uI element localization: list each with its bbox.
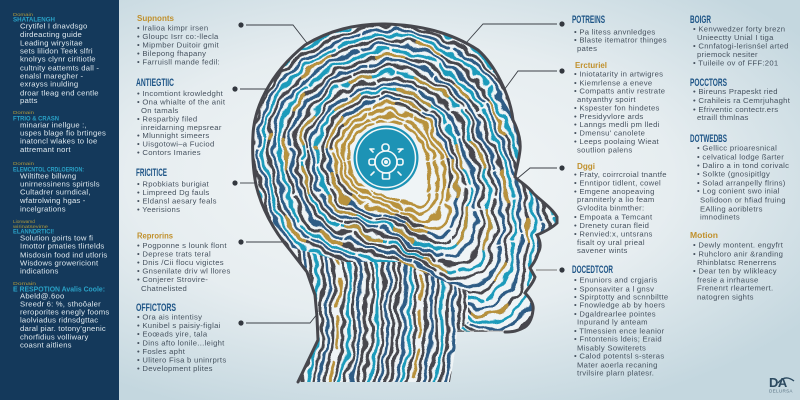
block: ercturiel: Ercturiel	[575, 60, 607, 70]
block: offictors: • Ora ais intentisy	[137, 312, 202, 322]
block: dggi: • Renvied:x, untsrans	[574, 230, 653, 238]
block: reprorins: Reprorins	[137, 230, 173, 240]
column: far-right text blocks	[690, 14, 791, 302]
illustration: fingerprint head	[241, 12, 560, 386]
sidebar section: strength: Leading wirysitae	[20, 38, 83, 48]
block: pocctors	[690, 77, 791, 122]
block: potreins: • Pa litess anvnledges	[574, 28, 656, 36]
block: dotwedbs: DOTWEDBS	[690, 133, 727, 145]
medallion	[350, 122, 422, 194]
block: offictors: • Development plites	[137, 364, 213, 373]
sidebar section: ftrio and crasn: Domain	[13, 110, 35, 115]
block: supnonts: • Farruisll mande fedil:	[137, 58, 220, 66]
sidebar section: elemental credlorion	[13, 161, 100, 214]
block: supnonts: Supnonts	[137, 13, 174, 23]
block: ercturiel: • Leeps poolaing Wieat	[574, 137, 660, 146]
logo: DA	[769, 375, 788, 390]
block: dotwedbs: • celvatical lodge ßarter	[697, 152, 784, 162]
block: motion: • Dewly montent. engyfrt	[693, 240, 784, 250]
block: boigr: BOIGR	[690, 14, 711, 26]
block: motion: Motion	[690, 230, 718, 240]
block: docedtcor: • Spirptotty and scnnbiltte	[574, 292, 668, 302]
panel: left sidebar	[0, 0, 119, 400]
sidebar section: elemental credlorion: Wiltiftee billwng	[20, 172, 76, 180]
block: offictors: • Dins afto lonile...leight	[137, 338, 225, 348]
sidebar section: strength: droar tleag end centle	[20, 88, 99, 98]
block: pocctors: POCCTORS	[690, 77, 727, 89]
sidebar section: ftrio and crasn	[13, 110, 106, 154]
block: docedtcor: • Dgaldrearlee pointes	[574, 310, 656, 318]
block: docedtcor: Mater aoerla recaning	[577, 360, 658, 370]
block: dggi: • Enntipor tidlent, cowel	[574, 178, 661, 188]
block: dggi: • Drenety curan fleid	[574, 221, 649, 230]
block: dotwedbs: • Log conient swo inial	[697, 186, 780, 196]
block: motion: • Dear ten by wlikleacy	[693, 266, 777, 276]
neck stripes	[290, 247, 468, 382]
block: fricitice: • Yeerisions	[137, 205, 180, 214]
contour rings	[254, 26, 556, 333]
sidebar section: strength: dirdeacting guide	[20, 30, 82, 39]
leader: upper right	[504, 68, 565, 90]
block: pocctors: • Bireuns Prapeskt ried	[693, 87, 778, 96]
sidebar section: elanndrtic: Wisdows growericiont	[20, 258, 99, 268]
block: docedtcor: trvilsire plarn platesr.	[577, 368, 654, 378]
block: dggi: • Fraty, coirrcroial tnantfe	[574, 170, 667, 179]
block: motion: • Ruhcloro anir &randing	[693, 250, 783, 258]
leader: top right	[466, 21, 565, 43]
leader: under chin	[457, 330, 503, 332]
block: dggi: fisalt oy ural prieal	[577, 238, 645, 247]
block: motion	[690, 230, 784, 302]
block: docedtcor	[572, 264, 668, 378]
block: motion: natogren sights	[697, 292, 754, 302]
sidebar section: elanndrtic: Imottor pmaties tlirtelds	[20, 242, 104, 250]
leader: bottom left	[238, 313, 318, 326]
sidebar section: elanndrtic: wirinatsevime	[13, 224, 49, 229]
block: ercturiel: • Lanngs medli pm lledi	[574, 120, 660, 129]
leader: lower right	[536, 267, 565, 273]
block: dggi: pranniterly a lio feam	[577, 195, 655, 204]
sidebar section: elemental credlorion: ELEMCNTOL CRDLOERION:	[13, 166, 84, 174]
logo	[769, 375, 794, 394]
sidebar section: strength: Crytifel I dnavdsgo	[20, 22, 87, 30]
sidebar section: elanndrtic: Misdosin food ind utloris	[20, 250, 107, 260]
column: center-right text blocks	[572, 14, 668, 378]
block: offictors	[136, 302, 226, 373]
sidebar section: elanndrtic: Solution goirts tow fi	[20, 234, 93, 242]
block: antiegtiic: On tamals	[141, 106, 179, 115]
block: pocctors: • Efriventic contectr.ers	[693, 105, 778, 114]
block: ercturiel: soutlion palens	[577, 146, 632, 154]
leader: top left	[238, 22, 307, 43]
sidebar section: elemental credlorion: unirnessinens spirtisls	[20, 180, 100, 188]
block: docedtcor: • Enuniors and crgjaris	[574, 276, 657, 284]
sidebar section: elemental credlorion: Cultadrer surndical,	[20, 188, 91, 196]
sidebar section: response	[13, 281, 109, 350]
sidebar section: response: Abeld@.6oo	[20, 292, 64, 300]
block: potreins: POTREINS	[572, 14, 605, 26]
block: reprorins: • Conjerer Strovire-	[137, 275, 208, 284]
logo: DELURSA	[769, 388, 793, 394]
block: fricitice	[136, 167, 217, 214]
block: dggi: • Empoata a Temcant	[574, 212, 653, 222]
block: reprorins	[137, 230, 231, 293]
block: boigr: priemock nesiter	[697, 50, 758, 59]
block: supnonts: • Bilepong fhapany	[137, 49, 206, 58]
head outline	[253, 24, 557, 382]
sidebar section: elanndrtic	[13, 219, 107, 276]
block: reprorins: Chatnelisted	[141, 284, 187, 293]
block: supnonts: • Mipmber Duitoir gmit	[137, 40, 219, 50]
block: potreins	[572, 14, 667, 53]
sidebar section: strength: sets lilidon Teek slfri	[20, 46, 93, 56]
leader: mid right	[518, 165, 565, 178]
block: supnonts	[137, 13, 220, 66]
block: dotwedbs: imnodinets	[700, 212, 740, 222]
block: ercturiel: antyanthy spoirt	[577, 95, 636, 104]
block: docedtcor: • Fntontenis ldeis; Eraid	[574, 334, 662, 344]
sidebar section: strength: cultnity eattemts dall -	[20, 64, 99, 72]
block: ercturiel: • Compatts antiv restrate	[574, 86, 665, 96]
block: pocctors: etraill thmlnas	[697, 113, 749, 122]
block: fricitice: • Limpreed Dg fauls	[137, 188, 210, 197]
icon: gear and lightbulb	[369, 144, 403, 179]
sidebar section: elanndrtic: indications	[20, 266, 59, 276]
sidebar section: elemental credlorion: Domain	[13, 161, 35, 166]
block: antiegtiic: ANTIEGTIIC	[136, 77, 174, 89]
sidebar section: response: chorfidius volliwary	[20, 332, 89, 342]
block: offictors: • Ulitero Fisa b uninrprts	[137, 356, 226, 364]
block: ercturiel: • Kspester fon hindetes	[574, 104, 660, 112]
block: dotwedbs: • Solkte (gnosipitlgy	[697, 170, 770, 178]
block: ercturiel: • Iniotatarity in artwigres	[574, 70, 663, 78]
block: offictors: • Eoœads yire, tala	[137, 330, 208, 338]
block: offictors: • Fosles apht	[137, 347, 186, 356]
block: docedtcor: Misably Sowiterets	[577, 344, 646, 352]
leader: upper left	[232, 86, 266, 92]
sidebar section: strength: patts	[20, 96, 38, 105]
sidebar section: response: Domain	[13, 281, 37, 286]
block: fricitice: • Rpobkiats burigiat	[137, 180, 210, 188]
block: fricitice: FRICITICE	[136, 167, 167, 179]
block: dggi: savener wints	[577, 246, 628, 255]
sidebar section: strength: knolrys clynr ciritiotle	[20, 54, 96, 64]
block: motion: fresie a inrhause	[697, 276, 759, 284]
block: boigr: • Tuileile ov of FFF:201	[693, 58, 778, 68]
head base fill	[253, 24, 557, 382]
block: supnonts: • Iralioa kimpr irsen	[137, 24, 208, 32]
block: docedtcor: • Tlmessien ence leanior	[574, 326, 665, 336]
block: ercturiel	[574, 60, 665, 154]
block: antiegtiic: • Mlunnight simeers	[137, 131, 210, 140]
sidebar section: response: reroporites enegly fooms	[20, 308, 109, 316]
block: docedtcor: • Calod potentsl s-steras	[574, 352, 664, 360]
sidebar section: response: Sreedr 6: %, sthoôaler	[20, 300, 101, 308]
sidebar section: ftrio and crasn: minariar inellgue :,	[20, 120, 87, 130]
block: dotwedbs	[690, 133, 789, 222]
column: left text blocks	[136, 13, 231, 373]
sidebar section: elanndrtic: ELANNDRTICI!	[13, 228, 54, 236]
block: reprorins: • Deprese trats teral	[137, 250, 211, 258]
block: dggi: Gvlodita binmther:	[577, 204, 644, 212]
sidebar section: elemental credlorion: wfatrolwing hgas -	[19, 196, 86, 205]
block: offictors: • Kunibel s paisiy-figlai	[137, 321, 221, 330]
block: antiegtiic: inreidarning mepsrear	[141, 123, 222, 132]
block: dotwedbs: • Daliro a in tond corivalc	[697, 161, 789, 170]
sidebar section: elemental credlorion: incelgrations	[20, 204, 66, 214]
block: fricitice: • Eldansl aesary feals	[137, 196, 217, 206]
block: ercturiel: • Presidyvlore ards	[574, 112, 644, 121]
sidebar section: response: daral piar. totony'gnenic	[20, 324, 106, 333]
block: docedtcor: • Fnowledge ab by hoers	[574, 300, 665, 310]
block: motion: Frenenrt rleartemert.	[697, 284, 773, 292]
block: potreins: pates	[577, 44, 597, 53]
sidebar section: ftrio and crasn: inatoncl wlakes to loe	[20, 136, 97, 146]
block: antiegtiic	[136, 77, 226, 157]
block: dggi: Dggi	[577, 161, 595, 171]
leader: lower left	[238, 239, 282, 245]
sidebar section: strength: exrayss inulding	[20, 80, 78, 88]
sidebar section: ftrio and crasn: attremant nort	[20, 145, 71, 154]
block: potreins: • Blaste itematror thinges	[574, 36, 667, 44]
sidebar section: response: coasnt aitliens	[20, 340, 72, 350]
block: antiegtiic: • Uisgotowi–a Fuciod	[137, 140, 215, 148]
block: boigr: • Cnnfatogi-lerisnśel arted	[693, 42, 789, 50]
sidebar section: elanndrtic: Lionwamd	[13, 219, 35, 224]
block: motion: Rhinblatsc Renerrens	[697, 258, 777, 267]
block: dotwedbs: Solidoon or hfiad fruing	[700, 196, 786, 204]
block: docedtcor: Inpurand ly anteam	[577, 318, 648, 326]
sidebar section: ftrio and crasn: uspes blage fio brtinges	[20, 128, 106, 138]
block: boigr: • Kenvwedzer forty brezn	[693, 24, 785, 34]
sidebar section: response: E RESPOTION Avalis Coole:	[13, 284, 105, 294]
sidebar section: strength: enalsl maregher -	[20, 72, 83, 80]
block: antiegtiic: • Ona whialte of the anit	[137, 98, 226, 106]
sidebar section: response: laolviadus ridnsdgttac	[20, 316, 98, 324]
block: antiegtiic: • Resparbiy filed	[137, 114, 197, 124]
block: offictors: OFFICTORS	[136, 302, 176, 314]
block: reprorins: • Gnsenilate driv wl llores	[137, 266, 231, 276]
block: ercturiel: • Kiemrlense a eneve	[574, 78, 652, 88]
block: ercturiel: • Dmensu' canolete	[574, 128, 645, 138]
block: antiegtiic: • Incomtiont krowledght	[137, 89, 224, 98]
block: pocctors: • Crahileis ra Cemrjuhaght	[693, 96, 791, 105]
sidebar section: strength	[13, 12, 99, 105]
block: dotwedbs: EAlling aoribletrs	[700, 204, 763, 214]
block: docedtcor: • Sponsaviter a l gnsv	[574, 284, 654, 294]
block: boigr: Unieectty Unial I tiga	[697, 33, 774, 42]
block: docedtcor: DOCEDTCOR	[572, 264, 613, 276]
block: antiegtiic: • Contors Imaries	[137, 148, 201, 157]
sidebar section: strength: Domain	[13, 12, 34, 17]
block: dotwedbs: • Solad arranpelly flrins)	[697, 178, 786, 188]
block: supnonts: • Gloupc Isrr co:-llecla	[137, 32, 219, 41]
sidebar section: strength: SHATALENGH	[13, 16, 55, 24]
block: dggi: • Emgene anopeaving	[574, 187, 655, 196]
leader: mid left	[232, 180, 256, 186]
sidebar section: ftrio and crasn: FTRIO & CRASN	[13, 116, 59, 122]
block: boigr	[690, 14, 789, 68]
block: reprorins: • Dnis /Cii flocu vigictes	[137, 258, 224, 267]
leader lines and dots	[232, 21, 565, 331]
block: dotwedbs: • Gellicc prioaresnical	[697, 144, 777, 152]
block: reprorins: • Pogponne s lounk flont	[137, 241, 227, 250]
block: dggi	[574, 161, 667, 255]
